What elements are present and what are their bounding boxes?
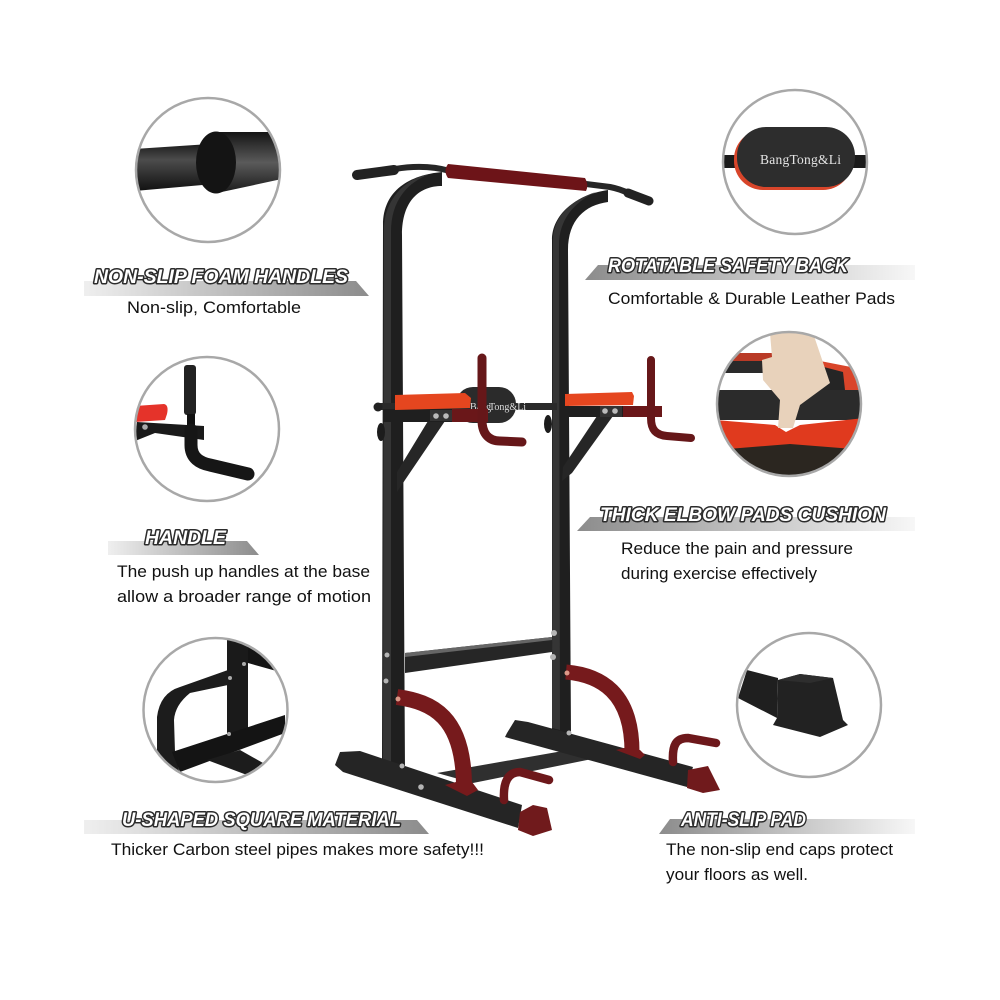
right dip handle	[651, 360, 691, 438]
banner	[108, 541, 259, 555]
description: Comfortable & Durable Leather Pads	[608, 289, 895, 308]
heading: U-SHAPED SQUARE MATERIAL	[122, 810, 401, 831]
feature: non-slip foam handles	[84, 98, 369, 317]
front small handle	[504, 772, 549, 800]
inset: leather back pad	[722, 90, 868, 234]
back cushion crossbar: Bang	[470, 402, 491, 413]
front end cap	[518, 805, 552, 836]
description: Reduce the pain and pressure	[621, 539, 853, 558]
description: The push up handles at the base	[117, 562, 370, 581]
power tower machine	[335, 164, 720, 836]
banner	[84, 281, 369, 296]
inset: end cap	[737, 633, 881, 777]
description: allow a broader range of motion	[117, 587, 371, 606]
back cushion crossbar	[374, 387, 557, 441]
inset: finger pressing pad	[715, 332, 866, 480]
feature: handle	[108, 357, 371, 606]
lower crossbar	[405, 637, 552, 673]
inset: foam handle	[135, 98, 282, 242]
heading: ROTATABLE SAFETY BACK	[608, 256, 849, 277]
back cushion crossbar: Tong&Li	[489, 402, 526, 413]
heading: THICK ELBOW PADS CUSHION	[600, 505, 887, 526]
right upright	[552, 190, 608, 735]
right diagonal brace	[562, 416, 613, 481]
heading: ANTI-SLIP PAD	[680, 810, 806, 831]
feature: rotatable safety back	[585, 90, 915, 308]
feature: anti-slip pad	[659, 633, 915, 884]
base: front beam	[335, 751, 522, 828]
description: during exercise effectively	[621, 564, 817, 583]
right dip bracket and pad	[563, 392, 662, 417]
left upright	[382, 172, 442, 772]
inset: push up handle	[135, 357, 279, 501]
back small handle	[673, 738, 716, 762]
description	[117, 562, 371, 606]
base: back beam	[505, 720, 693, 787]
banner	[659, 819, 915, 834]
left dip handle	[482, 358, 522, 442]
description	[621, 539, 853, 583]
description: Non-slip, Comfortable	[127, 298, 301, 317]
top pull-up bar	[356, 164, 649, 201]
feature: thick elbow pads cushion	[577, 332, 915, 583]
banner	[585, 265, 915, 280]
banner	[84, 820, 429, 834]
description: The non-slip end caps protect	[666, 840, 893, 859]
heading: HANDLE	[145, 528, 227, 549]
upright bolts	[384, 630, 572, 790]
back end cap	[687, 766, 720, 793]
inset: square tube frame	[144, 638, 288, 782]
description	[666, 840, 893, 884]
left diagonal brace	[397, 421, 445, 492]
base: center bar	[437, 745, 597, 783]
feature: u-shaped square material	[84, 638, 484, 859]
left dip bracket and pad	[383, 393, 488, 422]
right red lower handle	[564, 670, 645, 759]
banner	[577, 517, 915, 531]
description: Thicker Carbon steel pipes makes more safety!!!	[111, 840, 484, 859]
left red lower handle	[396, 696, 478, 796]
heading: NON-SLIP FOAM HANDLES	[94, 267, 348, 288]
inset: leather back pad: BangTong&Li	[760, 152, 841, 167]
description: your floors as well.	[666, 865, 808, 884]
